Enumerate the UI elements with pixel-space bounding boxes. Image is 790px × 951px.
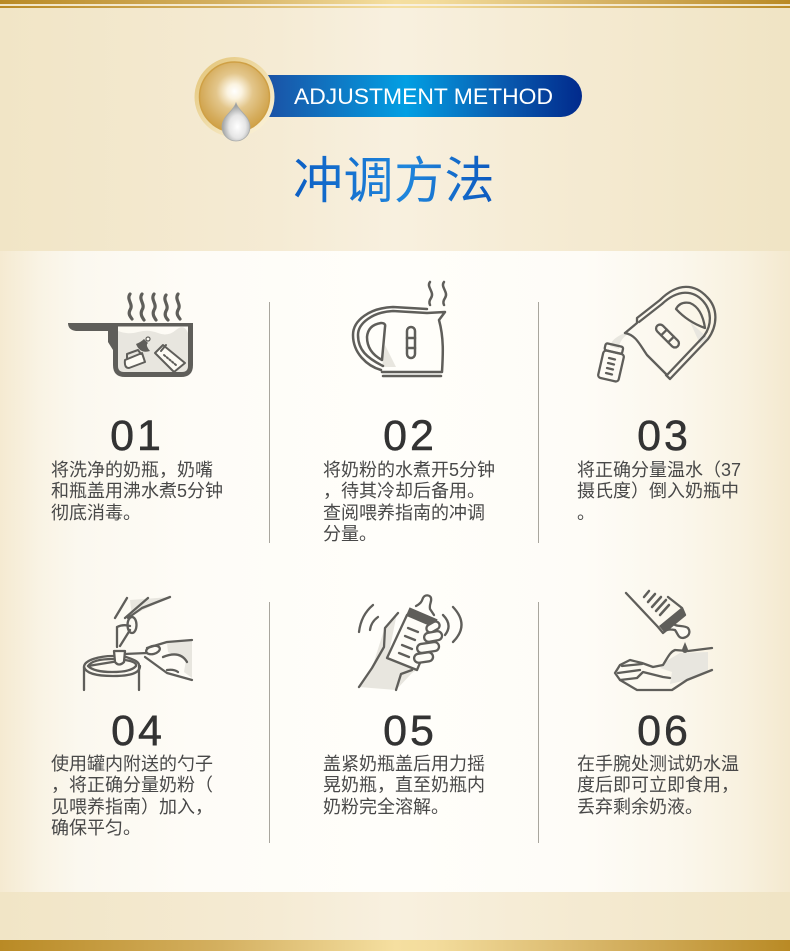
steps panel background	[0, 251, 790, 892]
step text 03: 摄氏度）倒入奶瓶中	[577, 481, 739, 501]
step text 02: ，待其冷却后备用。	[323, 481, 485, 501]
step text 02: 查阅喂养指南的冲调	[323, 503, 485, 523]
step text 03: 将正确分量温水（37	[577, 460, 741, 480]
top gold stripe	[0, 0, 790, 4]
step text 06: 丢弃剩余奶液。	[577, 797, 703, 817]
step text 01: 和瓶盖用沸水煮5分钟	[51, 481, 223, 501]
step text 06	[577, 754, 739, 817]
step number 01: 01	[110, 412, 164, 460]
icon: kettle pouring into bottle	[597, 286, 716, 383]
icon: scoop and powder can	[82, 596, 194, 692]
medal icon	[194, 57, 274, 141]
step number 05: 05	[383, 707, 437, 755]
step text 05: 奶粉完全溶解。	[323, 797, 449, 817]
step number 06: 06	[637, 707, 691, 755]
step text 06: 度后即可立即食用，	[577, 775, 739, 795]
icon: pot boiling bottle parts	[68, 292, 193, 377]
step text 05: 晃奶瓶，直至奶瓶内	[323, 775, 485, 795]
step text 04: 确保平匀。	[51, 818, 141, 838]
step text 05	[323, 754, 485, 817]
step text 04: 使用罐内附送的勺子	[51, 754, 213, 774]
step number 03: 03	[637, 412, 691, 460]
step text 04	[51, 754, 213, 838]
step text 02: 分量。	[323, 524, 377, 544]
step text 05: 盖紧奶瓶盖后用力摇	[323, 754, 485, 774]
step text 01: 将洗净的奶瓶，奶嘴	[51, 460, 213, 480]
step text 06: 在手腕处测试奶水温	[577, 754, 739, 774]
icon: kettle	[352, 280, 448, 378]
step text 01	[51, 460, 223, 523]
step text 01: 彻底消毒。	[51, 503, 141, 523]
badge: adjustment method banner	[194, 57, 582, 142]
bottom gold stripe	[0, 940, 790, 951]
banner pill	[262, 75, 582, 117]
top thin gold stripe	[0, 6, 790, 8]
footer band	[0, 892, 790, 940]
step text 03: 。	[577, 503, 595, 523]
step text 04: ，将正确分量奶粉（	[51, 775, 213, 795]
icon: testing milk on wrist	[614, 590, 714, 692]
header background	[0, 0, 790, 251]
icon: hand shaking bottle	[358, 594, 463, 692]
step text 04: 见喂养指南）加入，	[51, 797, 213, 817]
step text 03	[577, 460, 741, 523]
step number 02: 02	[383, 412, 437, 460]
step text 02: 将奶粉的水煮开5分钟	[323, 460, 495, 480]
title: 冲调方法	[293, 153, 495, 209]
step number 04: 04	[111, 707, 165, 755]
banner text: ADJUSTMENT METHOD	[294, 84, 553, 109]
step text 02	[323, 460, 495, 544]
